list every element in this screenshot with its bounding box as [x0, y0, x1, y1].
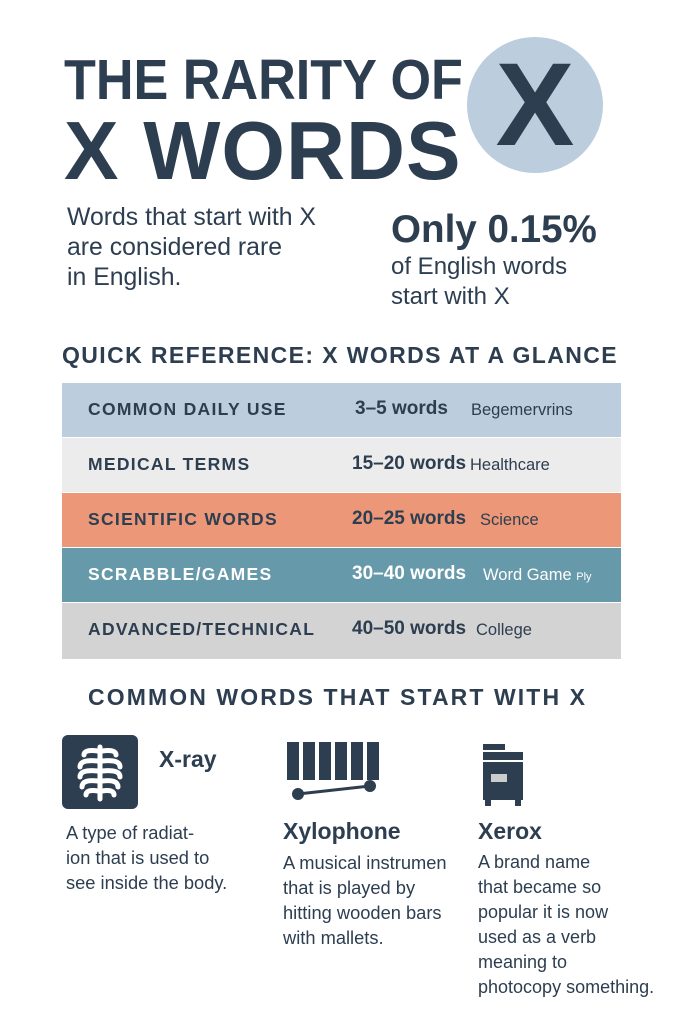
label: xerox: Xerox — [478, 818, 542, 844]
text: x-ray desc: A type of radiat- — [66, 822, 194, 843]
text: x-ray desc: ion that is used to — [66, 847, 209, 868]
row: scientific: 20–25 words — [352, 508, 466, 529]
text: xerox desc: used as a verb — [478, 927, 596, 947]
label: x-ray: X-ray — [159, 746, 217, 772]
text: xerox desc — [478, 852, 654, 997]
text: xerox desc: A brand name — [478, 852, 590, 872]
heading: common words: COMMON WORDS THAT START WITH X — [88, 684, 587, 710]
table — [62, 383, 621, 659]
intro text — [67, 204, 316, 291]
row: medical: Healthcare — [470, 456, 550, 474]
row: scrabble: Word Game Ply — [483, 566, 592, 584]
row: scientific: SCIENTIFIC WORDS — [88, 509, 278, 529]
intro text: in English. — [67, 264, 181, 291]
row: advanced: ADVANCED/TECHNICAL — [88, 619, 315, 639]
row: scrabble: 30–40 words — [352, 563, 466, 584]
title: THE RARITY OF — [64, 48, 463, 112]
icon: xerox — [483, 744, 523, 806]
row: medical — [62, 438, 621, 492]
text: xerox desc: photocopy something. — [478, 977, 654, 997]
icon: x-ray — [62, 735, 138, 809]
text: xylophone desc: with mallets. — [283, 927, 384, 948]
row: common daily use: Begemervrins — [471, 401, 573, 419]
stat callout — [391, 208, 597, 310]
circle badge X — [467, 37, 603, 173]
text: xerox desc: that became so — [478, 877, 601, 897]
row: scrabble — [62, 548, 621, 602]
title: X WORDS — [64, 104, 462, 197]
intro text: are considered rare — [67, 234, 282, 261]
text: xylophone desc — [283, 852, 447, 948]
text: xylophone desc: hitting wooden bars — [283, 902, 442, 923]
text: x-ray desc — [66, 822, 227, 893]
row: common daily use: COMMON DAILY USE — [88, 399, 287, 419]
text: xerox desc: meaning to — [478, 952, 567, 972]
text: xerox desc: popular it is now — [478, 902, 608, 922]
row: scientific — [62, 493, 621, 547]
title — [64, 48, 463, 197]
row: scrabble: SCRABBLE/GAMES — [88, 564, 272, 584]
icon: xylophone — [287, 742, 379, 800]
intro text: Words that start with X — [67, 204, 316, 231]
row: medical: MEDICAL TERMS — [88, 454, 250, 474]
stat callout: of English words — [391, 253, 567, 280]
label: xylophone: Xylophone — [283, 818, 401, 844]
row: common daily use — [62, 383, 621, 437]
circle badge X: X — [496, 39, 574, 171]
row: advanced — [62, 603, 621, 659]
text: xylophone desc: A musical instrumen — [283, 852, 447, 873]
heading: quick reference: QUICK REFERENCE: X WORDS AT A GLANCE — [62, 342, 618, 368]
stat callout: start with X — [391, 283, 510, 310]
row: medical: 15–20 words — [352, 453, 466, 474]
text: x-ray desc: see inside the body. — [66, 872, 227, 893]
text: xylophone desc: that is played by — [283, 877, 415, 898]
row: advanced: 40–50 words — [352, 618, 466, 639]
row: advanced: College — [476, 621, 532, 639]
row: scientific: Science — [480, 511, 539, 529]
row: common daily use: 3–5 words — [355, 398, 448, 419]
stat callout: Only 0.15% — [391, 208, 597, 251]
